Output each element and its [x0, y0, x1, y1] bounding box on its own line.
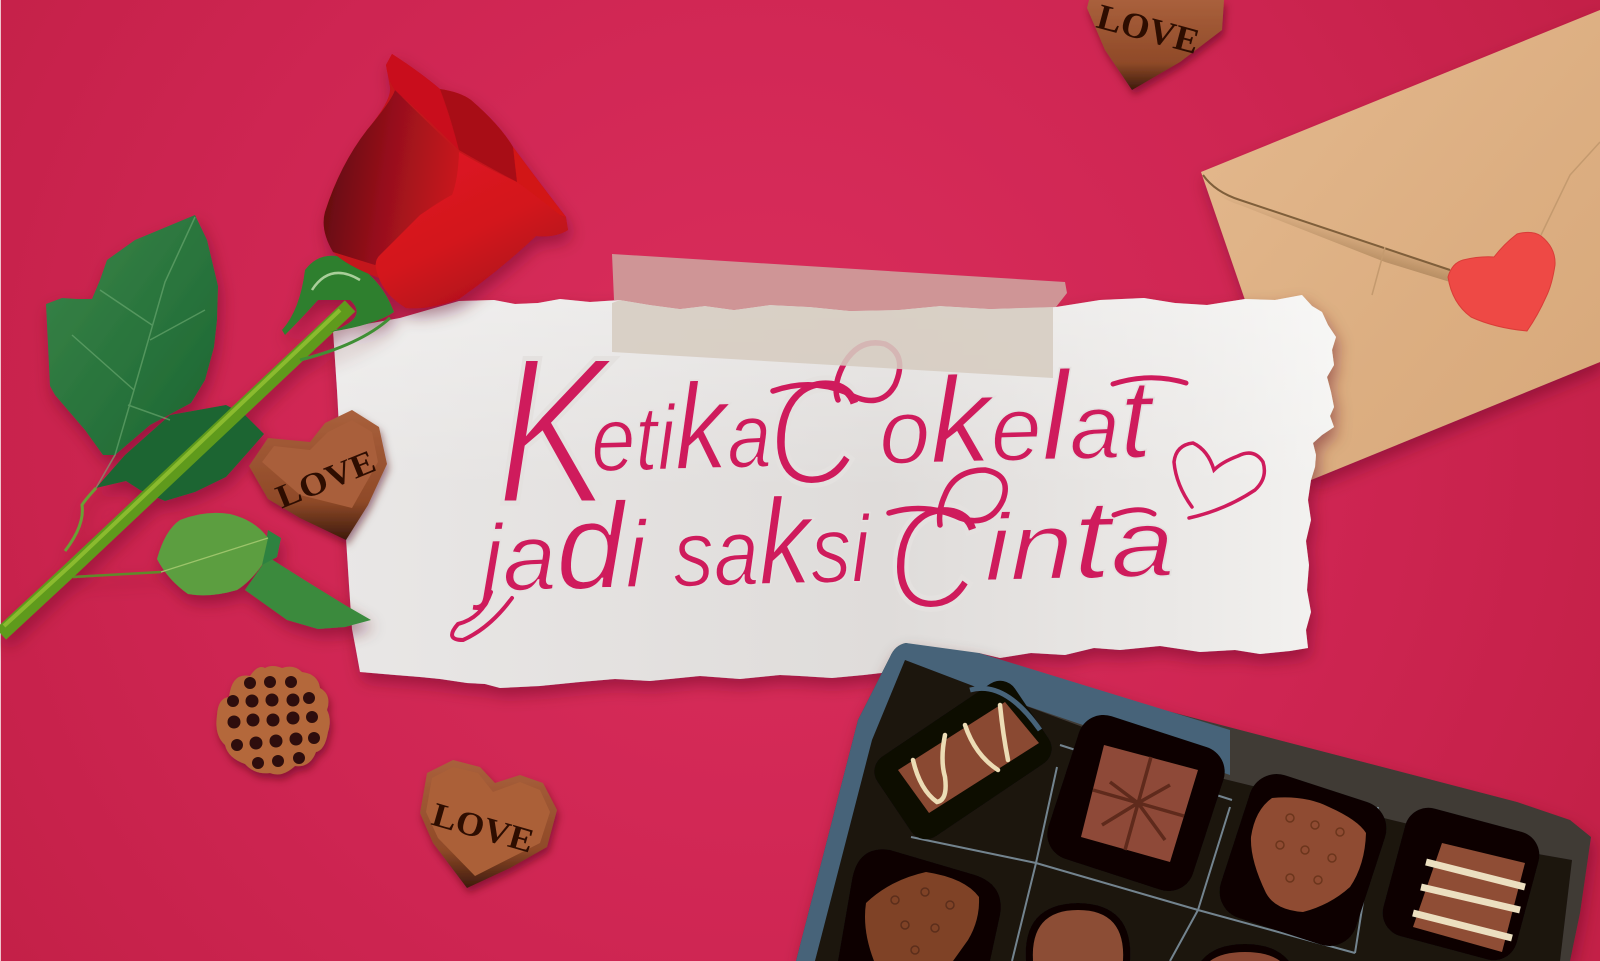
- title line 2: jadi saksi Cinta: C: [888, 475, 979, 640]
- rose bloom: [324, 54, 568, 308]
- chocolate box: [796, 643, 1591, 961]
- title line 2: jadi saksi Cinta: saksi: [671, 471, 873, 613]
- chocolate heart: middle LOVE: LOVE: [271, 444, 381, 516]
- chocolate: gift square: [1041, 708, 1231, 898]
- adhesive tape: [612, 254, 1067, 378]
- tray: [796, 643, 1591, 961]
- title line 1: Ketika Cokelat: [497, 313, 1186, 548]
- chocolate heart: bottom LOVE: LOVE: [428, 796, 538, 861]
- chocolate: round lower: [1201, 944, 1289, 961]
- chocolate: strawberry left: [838, 849, 1001, 961]
- rose sepals: [282, 256, 394, 335]
- chocolate: round middle: [1026, 903, 1130, 961]
- chocolate: striped square: [1377, 802, 1545, 961]
- icon: outline heart: [1174, 443, 1264, 518]
- envelope: [1201, 10, 1600, 480]
- chocolate heart: middle LOVE: [249, 410, 387, 540]
- tray dividers: [911, 745, 1378, 961]
- chocolate heart: top LOVE: [1087, 0, 1224, 90]
- waffle chocolate: [216, 666, 330, 774]
- title line 2: jadi saksi Cinta: [452, 470, 1176, 640]
- title line 1: Ketika Cokelat: etika: [589, 357, 773, 497]
- torn paper note: [333, 295, 1336, 688]
- chocolate: striped bar: [867, 674, 1059, 846]
- title line 1: Ketika Cokelat: K: [497, 313, 615, 548]
- leaf: small light: [73, 513, 371, 629]
- title line 1: Ketika Cokelat: okelat: [877, 343, 1157, 491]
- rose stem: [1, 306, 350, 634]
- heart sticker: [1448, 232, 1555, 331]
- chocolate heart: bottom LOVE: [420, 760, 557, 888]
- leaf: large: [46, 215, 264, 551]
- envelope flap fold: [1203, 175, 1450, 282]
- rose: [1, 54, 568, 634]
- chocolate: strawberry right: [1212, 767, 1394, 953]
- title line 2: jadi saksi Cinta: inta: [982, 475, 1176, 604]
- title line 1: Ketika Cokelat: C: [768, 347, 861, 517]
- title: [452, 313, 1264, 640]
- title line 2: jadi saksi Cinta: jadi: [468, 477, 651, 617]
